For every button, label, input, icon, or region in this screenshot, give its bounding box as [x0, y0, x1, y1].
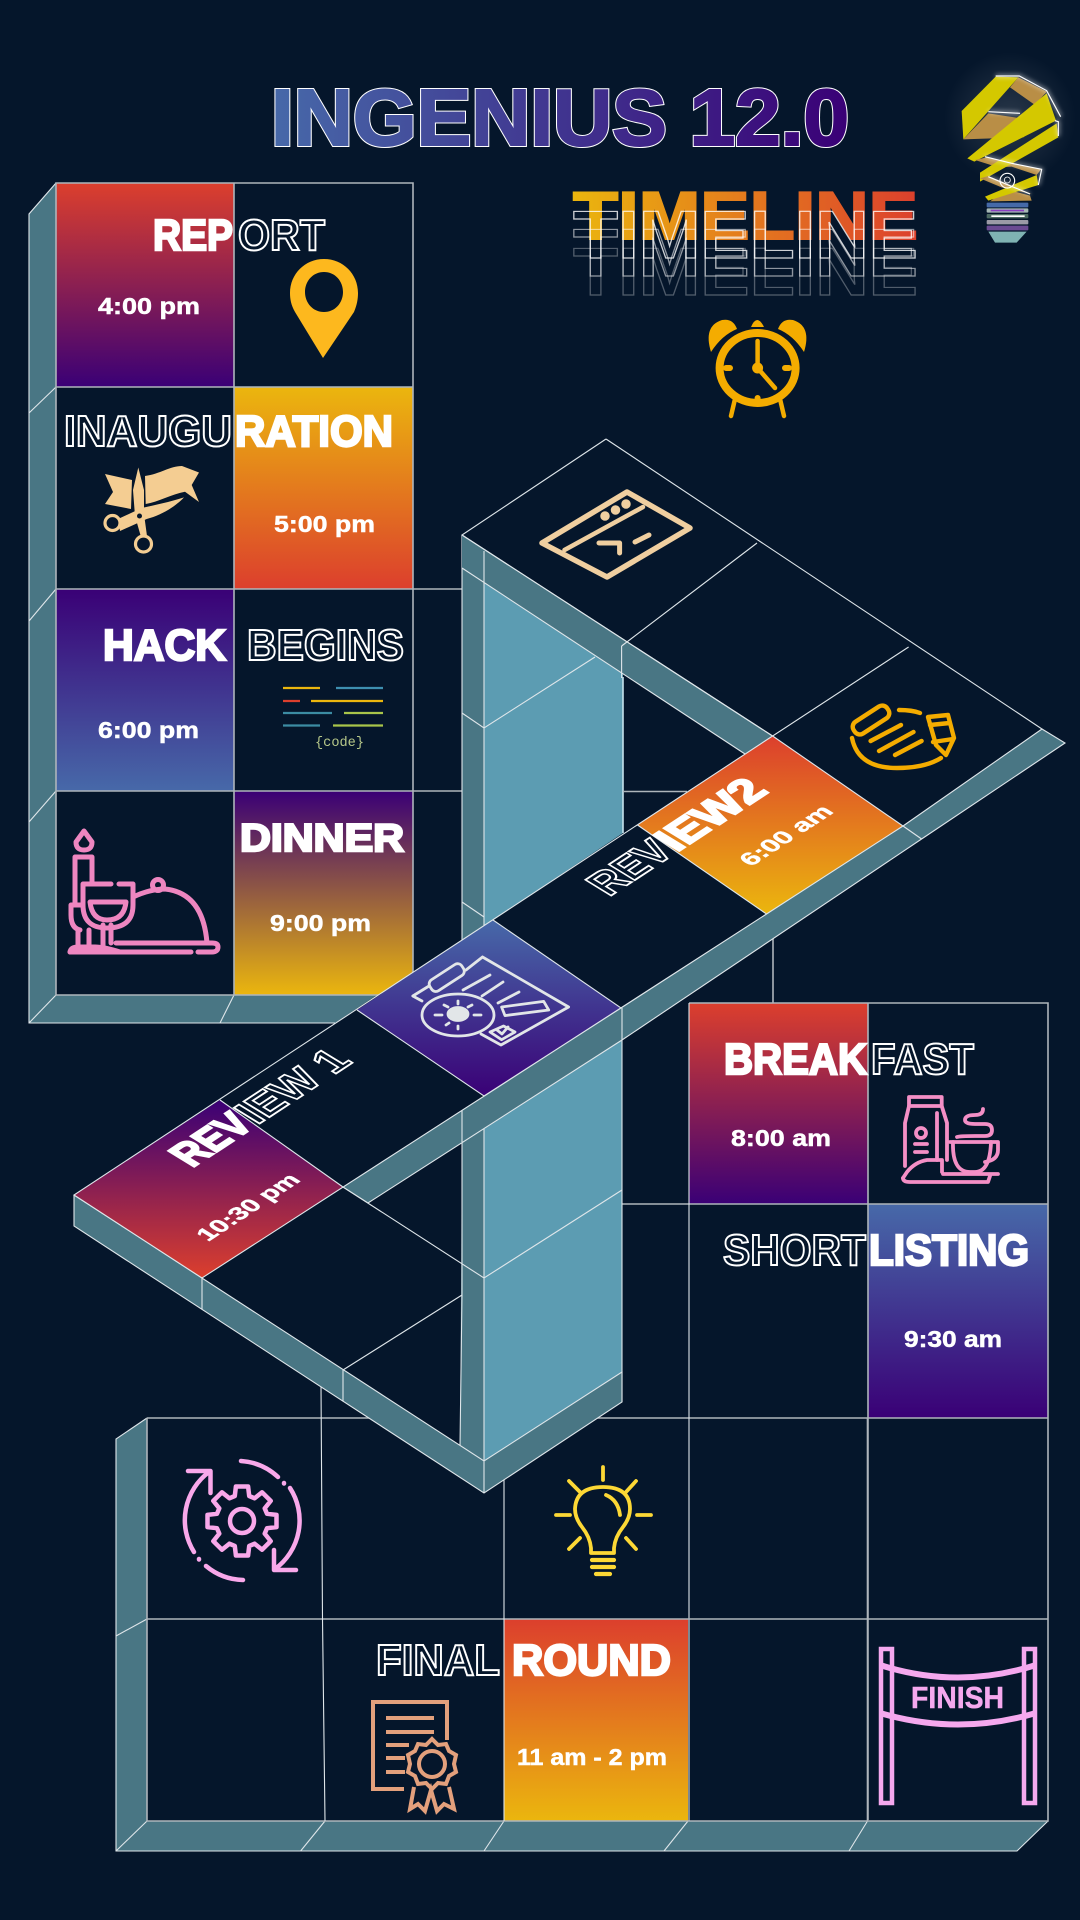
- icon: code lines: [283, 688, 383, 751]
- heading: review 2: REV: [576, 833, 684, 902]
- heading: inauguration: INAUGU: [64, 407, 232, 456]
- heading: breakfast: BREAK: [724, 1035, 867, 1084]
- icon: review clipboard and pencil: [850, 703, 954, 768]
- icon: candle, wine and cloche: [70, 831, 218, 952]
- icon: certificate: [373, 1702, 456, 1811]
- heading: hack begins: BEGINS: [247, 621, 404, 670]
- time: 4:00 pm: 4:00 pm: [98, 293, 200, 319]
- time: 11 am - 2 pm: 11 am - 2 pm: [517, 1744, 667, 1770]
- tile: shortlisting gradient: [868, 1204, 1048, 1418]
- panel: isometric walkway and pillars: [74, 439, 1065, 1493]
- lower plate: [202, 1187, 484, 1461]
- time: 9:30 am: 9:30 am: [904, 1326, 1002, 1352]
- heading: breakfast: FAST: [871, 1035, 974, 1084]
- heading: review 1: IEW 1: [224, 1042, 362, 1130]
- icon: code window: [542, 492, 690, 577]
- panel: top-left schedule block: [29, 183, 462, 1023]
- heading: review 1: REV: [159, 1106, 264, 1173]
- time: 10:30 pm: 10:30 pm: [190, 1170, 306, 1245]
- icon: gear with arrows: [185, 1461, 300, 1580]
- heading: hack begins: HACK: [103, 621, 226, 670]
- heading: timeline: [573, 178, 918, 310]
- icon: idea checklist: [413, 957, 569, 1045]
- timeline echo 1: TIMELINE: [573, 197, 918, 273]
- icon: code lines: {code}: [315, 735, 364, 751]
- tile: dinner gradient: [234, 791, 413, 995]
- heading: final round: ROUND: [512, 1636, 671, 1685]
- lower pillar: [343, 1008, 622, 1461]
- heading: report: ORT: [238, 211, 325, 260]
- upper pillar: [462, 535, 687, 940]
- heading: final round: FINAL: [376, 1636, 500, 1685]
- block sides: [116, 1418, 1048, 1851]
- tile: review 2 gradient: [638, 736, 903, 914]
- icon: alarm clock: [709, 320, 806, 416]
- time: 8:00 am: 8:00 am: [731, 1125, 831, 1151]
- timeline echo 2: TIMELINE: [573, 215, 918, 291]
- icon: breakfast: [903, 1097, 998, 1182]
- title white edge: INGENIUS 12.0: [271, 73, 849, 162]
- walkway surface: [74, 439, 1042, 1278]
- icon: finish banner: [880, 1649, 1036, 1803]
- tile: hack gradient: [56, 589, 234, 791]
- heading: report: REP: [153, 211, 233, 260]
- tile: review 1 gradient: [74, 1100, 343, 1278]
- logo glow: [944, 52, 1076, 184]
- time: 5:00 pm: 5:00 pm: [274, 511, 375, 537]
- tile: ideas blue gradient: [357, 920, 621, 1096]
- tile: report gradient: [56, 183, 234, 387]
- time: 6:00 pm: 6:00 pm: [98, 717, 199, 743]
- heading: inauguration: RATION: [235, 407, 393, 456]
- tile: inauguration gradient: [234, 387, 413, 589]
- icon: light bulb: [556, 1467, 651, 1574]
- tile: final round gradient: [504, 1619, 688, 1821]
- heading: dinner: DINNER: [240, 817, 404, 860]
- heading: shortlisting: SHORT: [723, 1226, 866, 1275]
- title gradient face: INGENIUS 12.0: [271, 73, 849, 162]
- icon: finish banner: FINISH: [911, 1680, 1004, 1715]
- time: 9:00 pm: 9:00 pm: [270, 910, 371, 936]
- logo: glowing ribbon bulb: [944, 52, 1076, 243]
- time: 6:00 am: 6:00 am: [733, 801, 839, 870]
- title: [271, 73, 849, 162]
- panel: right schedule block: [147, 936, 1048, 1821]
- icon: location pin: [290, 259, 358, 358]
- panel: lower schedule block: [116, 1385, 1048, 1851]
- timeline solid word: TIMELINE: [573, 178, 918, 254]
- tile: breakfast gradient: [689, 1003, 868, 1204]
- block sides: [29, 183, 377, 1023]
- walkway edge bands: [74, 535, 1065, 1493]
- icon: ribbon and scissors: [105, 466, 199, 552]
- timeline echo 3: TIMELINE: [573, 234, 918, 310]
- heading: review 2: IEW2: [644, 771, 778, 858]
- heading: shortlisting: LISTING: [869, 1226, 1029, 1275]
